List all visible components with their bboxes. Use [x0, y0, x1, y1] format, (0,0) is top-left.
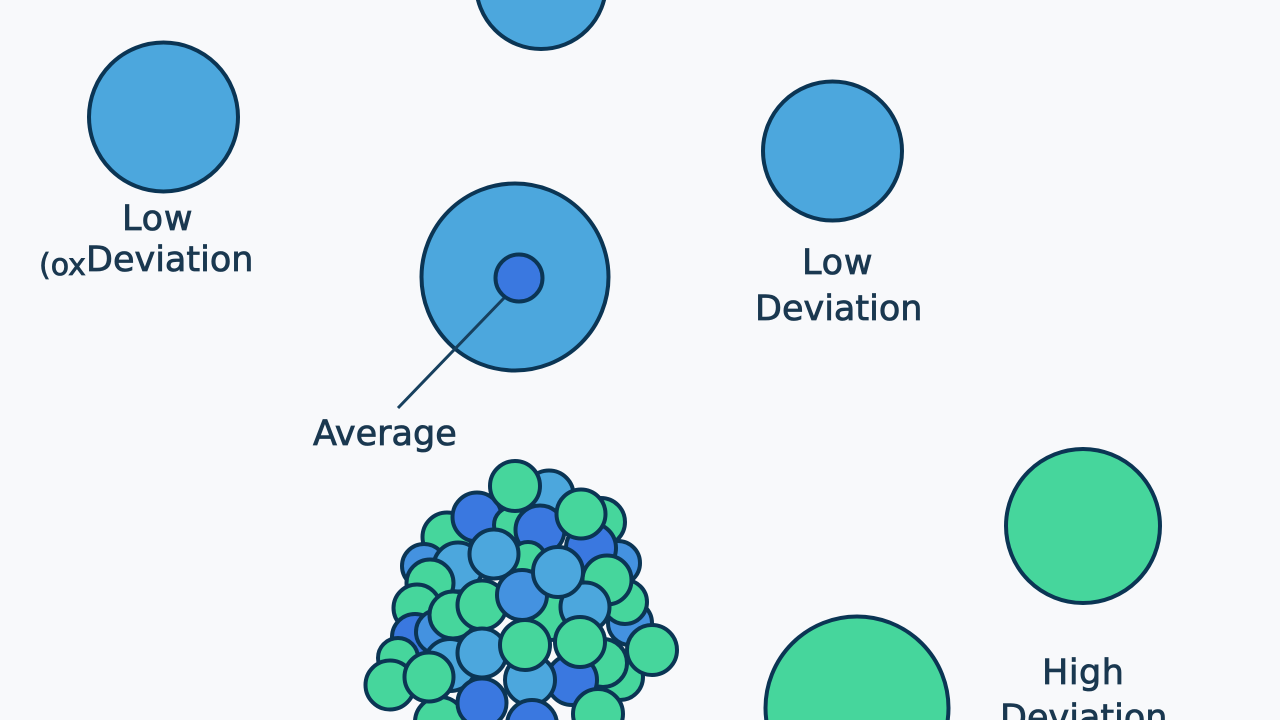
label: left low deviation [39, 199, 253, 283]
label: high deviation: High [1042, 653, 1124, 693]
label: left low deviation: (ox [39, 248, 86, 283]
circle: right high deviation [1006, 449, 1160, 603]
circle: bottom high deviation [766, 616, 948, 720]
average marker: circle with centre point [398, 184, 608, 408]
label: right low deviation: Deviation [755, 289, 922, 329]
label: average: Average [313, 414, 457, 454]
circle: top low deviation [476, 0, 606, 49]
circle: left low deviation [89, 42, 238, 192]
label: left low deviation: Low [122, 199, 193, 239]
label: right low deviation [755, 243, 922, 329]
circle: right low deviation [763, 82, 902, 220]
label: left low deviation: Deviation [86, 240, 253, 280]
cluster of overlapping circles [366, 461, 677, 720]
label: high deviation [1000, 653, 1167, 720]
label: right low deviation: Low [802, 243, 873, 283]
